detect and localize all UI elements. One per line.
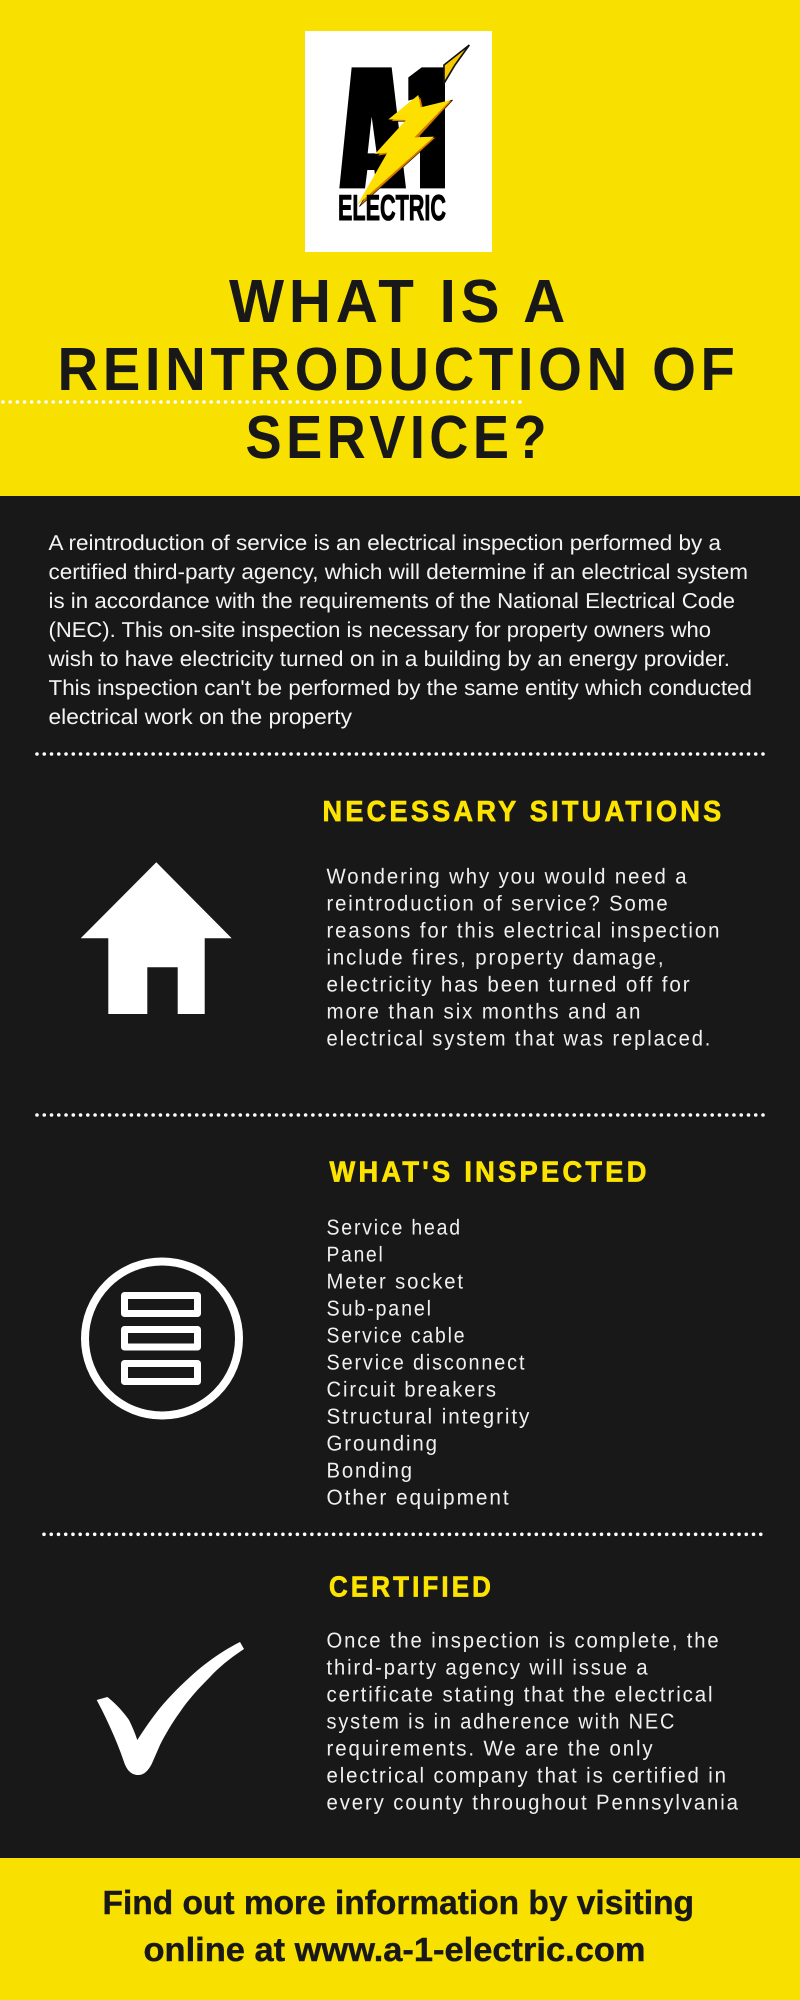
list: inspected items: Service head [326,1215,462,1239]
heading: necessary situations: NECESSARY SITUATIONS [322,796,724,828]
text block: necessary situations: more than six months and an [326,999,642,1023]
footer call to action: Find out more information by visiting [102,1885,694,1922]
heading: certified: CERTIFIED [329,1571,494,1603]
title: REINTRODUCTION OF [58,335,740,403]
list: inspected items: Structural integrity [326,1404,531,1428]
list: inspected items: Meter socket [326,1269,465,1293]
list: inspected items: Service cable [326,1323,466,1347]
text block: necessary situations: include fires, property damage, [326,945,666,969]
text block: certified: Once the inspection is complete, the [326,1628,720,1652]
list: inspected items: Grounding [326,1431,439,1455]
title: SERVICE? [246,403,551,471]
text block: certified: certificate stating that the electrical [326,1682,714,1706]
footer call to action [102,1885,694,1969]
list: inspected items: Service disconnect [326,1350,526,1374]
icon: check mark [97,1642,244,1775]
icon: house [81,862,232,1014]
text block: introduction: certified third-party agency, which will determine if an electrical system [48,560,748,584]
heading: what's inspected: WHAT'S INSPECTED [330,1156,650,1188]
list: inspected items: Circuit breakers [326,1377,498,1401]
text block: necessary situations: Wondering why you would need a [326,864,688,888]
text block: introduction: This inspection can't be performed by the same entity which conducted [48,676,752,700]
panel: necessary situations [81,796,724,1050]
text block: necessary situations: electrical system that was replaced. [326,1026,712,1050]
text block: certified: requirements. We are the only [326,1736,654,1760]
text block: certified: electrical company that is certified in [326,1763,728,1787]
list: inspected items: Panel [326,1242,385,1266]
logo: A1 Electric: ELECTRIC [338,187,446,228]
logo: A1 Electric [305,31,492,252]
list: inspected items [326,1215,531,1509]
text block: necessary situations: reasons for this electrical inspection [326,918,721,942]
panel: yellow header [0,0,800,496]
list: inspected items: Other equipment [326,1485,511,1509]
text block: certified: system is in adherence with NEC [326,1709,676,1733]
text block: introduction: (NEC). This on-site inspection is necessary for property owners who [48,618,711,642]
footer call to action: online at www.a-1-electric.com [144,1932,646,1969]
text block: certified [326,1628,740,1814]
text block: introduction: is in accordance with the requirements of the National Electrical Code [48,589,735,613]
panel: yellow footer [0,1858,800,2000]
text block: certified: every county throughout Pennsylvania [326,1790,740,1814]
text block: introduction: A reintroduction of service is an electrical inspection performed by a [48,531,721,555]
icon: circled panel [85,1262,239,1416]
panel: certified [97,1571,740,1814]
panel: dark body background [0,496,800,1858]
panel: what's inspected [85,1156,650,1509]
text block: introduction [47,531,752,729]
text block: necessary situations [326,864,721,1050]
title: WHAT IS A [229,267,570,335]
text block: necessary situations: reintroduction of service? Some [326,891,670,915]
text block: introduction: wish to have electricity turned on in a building by an energy provider. [47,647,730,671]
title [58,267,740,471]
text block: introduction: electrical work on the property [48,705,352,729]
list: inspected items: Sub-panel [326,1296,433,1320]
list: inspected items: Bonding [326,1458,414,1482]
text block: necessary situations: electricity has been turned off for [326,972,692,996]
text block: certified: third-party agency will issue a [326,1655,650,1679]
